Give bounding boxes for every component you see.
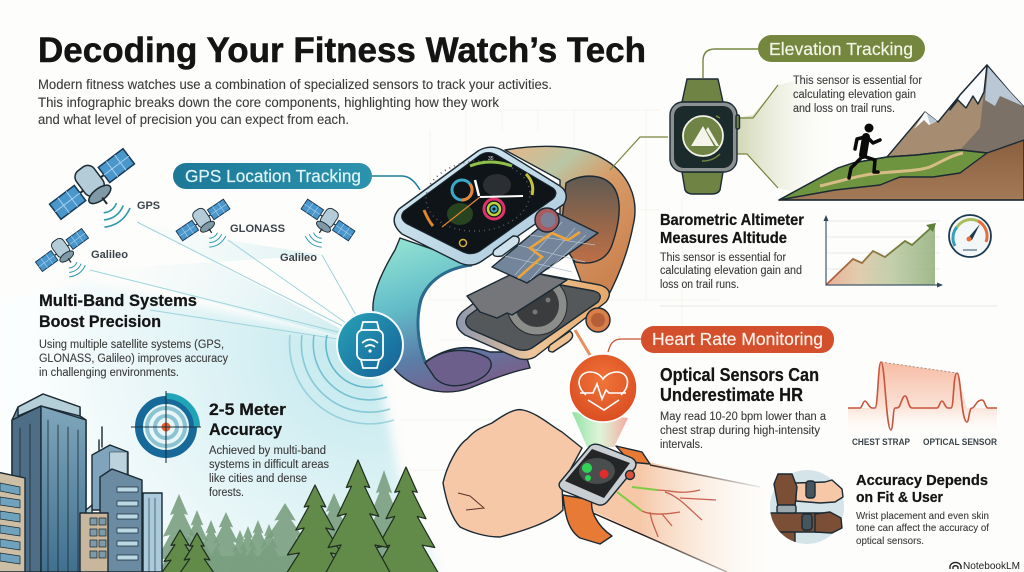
heading: accuracy depends: on Fit & User bbox=[856, 489, 943, 506]
runner bbox=[849, 124, 880, 178]
signal beam area bbox=[0, 222, 440, 572]
satellite: Galileo right bbox=[280, 194, 358, 264]
satellite: GPS: GPS bbox=[137, 200, 160, 212]
text: optical sensors body: intervals. bbox=[660, 439, 703, 451]
icon: altimeter watch bbox=[670, 79, 740, 194]
text: barometric body: calculating elevation gain and bbox=[660, 265, 802, 277]
elevation pill and connector bbox=[703, 35, 925, 78]
building: small beige bbox=[80, 513, 108, 572]
left band bbox=[373, 238, 530, 392]
illustration: mountain and runner bbox=[779, 65, 1024, 200]
illustration: background forest bbox=[149, 470, 411, 572]
icon: gauge bbox=[949, 215, 991, 257]
heading: accuracy: 2-5 Meter bbox=[209, 400, 286, 419]
elevation zoom wedge bbox=[610, 72, 830, 200]
building: left low bbox=[0, 472, 25, 572]
icon: watch with wifi hub bbox=[290, 312, 403, 424]
text: accuracy depends body: tone can affect the accuracy of bbox=[856, 522, 989, 534]
text: accuracy body: forests. bbox=[209, 487, 244, 499]
heading: optical sensors: Underestimate HR bbox=[660, 385, 803, 405]
illustration: foreground trees bbox=[150, 460, 444, 572]
back case bbox=[457, 272, 610, 360]
building: main tower bbox=[12, 394, 86, 572]
satellite: Galileo left: Galileo bbox=[91, 249, 128, 261]
building: second tower bbox=[86, 427, 128, 520]
building: front tower bbox=[100, 469, 142, 572]
intro text: Modern fitness watches use a combination of specialized sensors to track your activities. bbox=[38, 77, 552, 92]
intro text bbox=[38, 77, 552, 127]
ECG chart: CHEST STRAP bbox=[852, 437, 911, 448]
main exploded watch bbox=[373, 146, 635, 392]
right band bbox=[505, 146, 635, 300]
text: elevation body: calculating elevation gain bbox=[793, 89, 916, 101]
top case and screen: 35 bbox=[488, 156, 494, 162]
satellite: Galileo right: Galileo bbox=[280, 252, 317, 264]
intro text: This infographic breaks down the core components, highlighting how they work bbox=[38, 95, 499, 110]
text: optical sensors body: May read 10-20 bpm lower than a bbox=[660, 411, 827, 423]
text: accuracy body: Achieved by multi-band bbox=[209, 445, 326, 457]
GPS label pill: GPS Location Tracking bbox=[185, 166, 361, 186]
text: barometric body bbox=[660, 252, 802, 291]
sensor beam bbox=[572, 412, 628, 447]
text: multi-band body: in challenging environments. bbox=[39, 367, 179, 379]
sensor plate bbox=[467, 270, 567, 318]
heart rate pill: Heart Rate Monitoring bbox=[652, 329, 823, 349]
text: barometric body: This sensor is essential for bbox=[660, 252, 786, 264]
satellite: GLONASS: GLONASS bbox=[230, 223, 285, 235]
wrist watch bbox=[559, 444, 636, 505]
text: optical sensors body bbox=[660, 411, 827, 451]
satellite: Galileo left bbox=[32, 224, 128, 290]
satellite: GLONASS bbox=[173, 194, 285, 260]
heart rate icon bbox=[567, 330, 639, 424]
building: right tower bbox=[143, 493, 162, 572]
watch face details bbox=[423, 157, 533, 235]
heading: optical sensors: Optical Sensors Can bbox=[660, 365, 819, 385]
heading: multi-band: Multi-Band Systems bbox=[39, 291, 197, 310]
heading: optical sensors bbox=[660, 365, 819, 405]
text: elevation body: This sensor is essential for bbox=[793, 75, 922, 87]
text: elevation body: and loss on trail runs. bbox=[793, 103, 895, 115]
heart rate pill bbox=[608, 326, 834, 353]
text: barometric body: loss on trail runs. bbox=[660, 279, 739, 291]
forearm bbox=[590, 450, 770, 572]
heading: barometric: Barometric Altimeter bbox=[660, 212, 804, 229]
heading: barometric bbox=[660, 212, 804, 247]
text: accuracy depends body: Wrist placement and even skin bbox=[856, 510, 989, 522]
crown bbox=[535, 208, 559, 232]
icon: target bbox=[131, 391, 201, 463]
top case and screen bbox=[394, 147, 566, 265]
elevation pill and connector: Elevation Tracking bbox=[769, 39, 913, 59]
GPS label pill bbox=[173, 163, 420, 190]
fist bbox=[443, 410, 582, 537]
map layer bbox=[492, 213, 598, 283]
strap bbox=[563, 446, 650, 544]
heading: accuracy depends bbox=[856, 472, 988, 506]
text: multi-band body bbox=[39, 339, 228, 379]
altitude line chart bbox=[824, 215, 943, 288]
text: accuracy depends body bbox=[856, 510, 989, 547]
title: Decoding Your Fitness Watch’s Tech bbox=[38, 31, 646, 70]
veins bbox=[632, 487, 657, 490]
text: multi-band body: GLONASS, Galileo) improves accuracy bbox=[39, 353, 228, 365]
text: accuracy depends body: optical sensors. bbox=[856, 535, 924, 547]
hand with watch and sensors bbox=[443, 410, 770, 572]
satellite: GPS bbox=[44, 141, 160, 249]
text: multi-band body: Using multiple satellite systems (GPS, bbox=[39, 339, 224, 351]
intro text: and what level of precision you can expect from each. bbox=[38, 112, 349, 127]
text: accuracy body: like cities and dense bbox=[209, 473, 307, 485]
text: optical sensors body: chest strap during high-intensity bbox=[660, 425, 820, 437]
heading: accuracy depends: Accuracy Depends bbox=[856, 472, 988, 489]
heading: accuracy bbox=[209, 400, 286, 439]
icon: wrists with watches bbox=[765, 470, 844, 545]
heading: multi-band bbox=[39, 291, 197, 331]
NotebookLM logo: NotebookLM bbox=[963, 560, 1020, 572]
text: accuracy body: systems in difficult areas bbox=[209, 459, 329, 471]
ECG chart bbox=[848, 362, 997, 448]
ECG chart: OPTICAL SENSOR bbox=[923, 437, 997, 448]
heading: barometric: Measures Altitude bbox=[660, 230, 787, 247]
heading: multi-band: Boost Precision bbox=[39, 312, 161, 331]
text: accuracy body bbox=[209, 445, 329, 499]
illustration: city buildings bbox=[0, 394, 162, 572]
heading: accuracy: Accuracy bbox=[209, 420, 283, 439]
text: elevation body bbox=[793, 75, 922, 115]
